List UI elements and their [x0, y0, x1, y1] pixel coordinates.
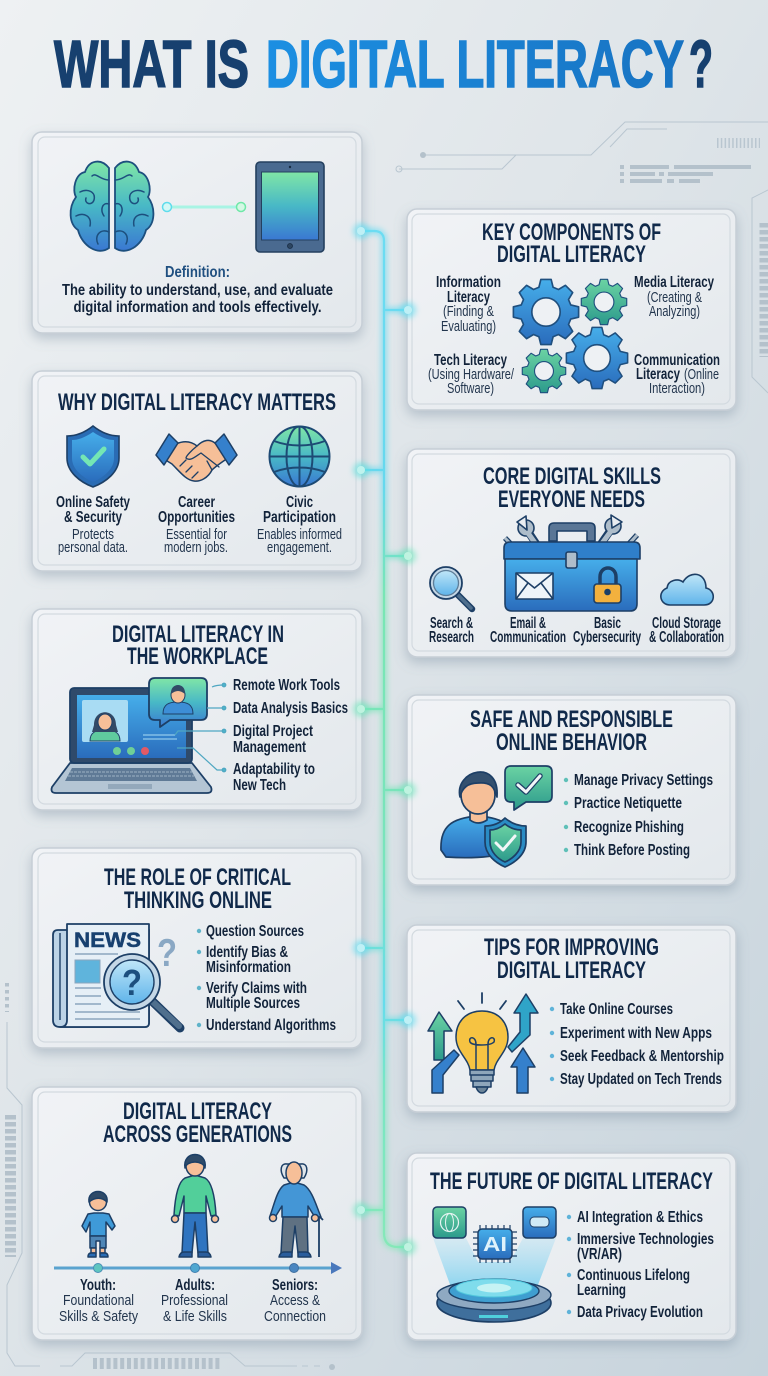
- icon: person with shield and chat: [441, 766, 552, 867]
- text: information literacy: [436, 274, 501, 335]
- panel: critical thinking: [32, 848, 362, 1048]
- text: skill labels: Email &: [510, 615, 546, 632]
- text: youth: Skills & Safety: [59, 1308, 138, 1325]
- text: tech literacy: Software): [447, 380, 494, 397]
- text: seniors: Connection: [264, 1308, 326, 1325]
- heading: WHY DIGITAL LITERACY MATTERS: [58, 389, 336, 416]
- icon: senior figure: [270, 1162, 323, 1257]
- heading: [482, 219, 661, 268]
- definition text: digital information and tools effectively.: [74, 299, 322, 316]
- list: critical thinking: Misinformation: [206, 959, 291, 976]
- icon: light bulb with arrows: [428, 993, 538, 1093]
- timeline arrow: [54, 1262, 342, 1274]
- text: online safety: & Security: [64, 509, 122, 526]
- heading: [484, 934, 659, 984]
- callout lines: [175, 683, 226, 772]
- list: workplace skills: Adaptability to: [233, 761, 315, 778]
- list: future trends: AI Integration & Ethics: [577, 1209, 703, 1226]
- text: communication literacy: Interaction): [649, 380, 705, 397]
- icon: laptop with video call: [52, 678, 212, 793]
- heading: DIGITAL LITERACY: [497, 241, 646, 268]
- heading: TIPS FOR IMPROVING: [484, 934, 659, 961]
- list: tips: [550, 1001, 724, 1088]
- icon: magnifier: [430, 567, 472, 609]
- text: skill labels: Search &: [430, 615, 473, 632]
- text: online safety: Protects: [72, 526, 114, 543]
- panel: key components: [407, 209, 736, 410]
- icon: toolbox: [504, 515, 640, 611]
- list: workplace skills: Digital Project: [233, 723, 313, 740]
- definition text: Definition:: [165, 264, 230, 281]
- text: media literacy: [634, 274, 714, 320]
- definition text: The ability to understand, use, and evaluate: [62, 282, 333, 299]
- heading: DIGITAL LITERACY IN: [112, 621, 284, 648]
- connector: brain to tablet: [162, 202, 246, 212]
- text: youth: Foundational: [63, 1292, 134, 1309]
- text: career opportunities: Opportunities: [158, 509, 235, 526]
- list: tips: Experiment with New Apps: [560, 1025, 712, 1042]
- list: workplace skills: New Tech: [233, 777, 286, 794]
- text: youth: [59, 1277, 138, 1325]
- list: tips: Take Online Courses: [560, 1001, 673, 1018]
- list: safe behaviors: Manage Privacy Settings: [574, 772, 713, 789]
- heading: ONLINE BEHAVIOR: [496, 729, 647, 756]
- text: seniors: Seniors:: [272, 1277, 318, 1294]
- text: online safety: Online Safety: [56, 494, 130, 511]
- heading: [103, 1098, 292, 1148]
- heading: [112, 621, 284, 670]
- list: safe behaviors: [564, 772, 713, 859]
- icon: gears: [513, 279, 628, 393]
- heading: THINKING ONLINE: [124, 887, 272, 914]
- heading: [483, 463, 661, 513]
- heading: ACROSS GENERATIONS: [103, 1121, 292, 1148]
- icon: newspaper and magnifier: NEWS: [74, 929, 141, 952]
- text: skill labels: & Collaboration: [649, 629, 724, 646]
- text: adults: Professional: [161, 1292, 228, 1309]
- list: critical thinking: [197, 923, 336, 1034]
- list: safe behaviors: Practice Netiquette: [574, 795, 682, 812]
- list: future trends: (VR/AR): [577, 1246, 622, 1263]
- panel: definition: [32, 132, 362, 333]
- icon: shield: [67, 426, 119, 487]
- icon: adult figure: [172, 1154, 218, 1257]
- list: future trends: [567, 1209, 714, 1321]
- icon: AI hologram platform: [433, 1207, 556, 1322]
- text: career opportunities: Career: [178, 494, 215, 511]
- panel: why digital literacy matters: [32, 371, 362, 571]
- panel: workplace: [32, 609, 362, 810]
- panel: future: [407, 1153, 736, 1340]
- text: skill labels: Research: [429, 629, 474, 646]
- heading: DIGITAL LITERACY: [123, 1098, 272, 1125]
- text: civic participation: engagement.: [267, 539, 332, 556]
- icon: brain: [71, 162, 153, 251]
- text: tech literacy: (Using Hardware/: [428, 366, 515, 383]
- heading: THE WORKPLACE: [127, 643, 268, 670]
- text: civic participation: Civic: [286, 494, 313, 511]
- list: critical thinking: Understand Algorithms: [206, 1017, 336, 1034]
- icon: handshake: [156, 434, 237, 481]
- list: safe behaviors: Recognize Phishing: [574, 819, 684, 836]
- icon: cloud: [661, 574, 713, 605]
- title: ?: [689, 27, 713, 102]
- text: tech literacy: [428, 352, 515, 397]
- heading: CORE DIGITAL SKILLS: [483, 463, 661, 490]
- icon: newspaper and magnifier: ?: [122, 962, 142, 1003]
- text: communication literacy: Communication: [634, 352, 720, 369]
- text: communication literacy: [634, 352, 720, 397]
- text: skill labels: Cybersecurity: [573, 629, 641, 646]
- text: adults: & Life Skills: [163, 1308, 227, 1325]
- definition text: [62, 264, 333, 316]
- list: future trends: Data Privacy Evolution: [577, 1304, 703, 1321]
- icon: newspaper and magnifier: ?: [157, 932, 177, 975]
- text: youth: Youth:: [80, 1277, 116, 1294]
- panel: generations: [32, 1087, 362, 1340]
- text: career opportunities: [158, 494, 235, 556]
- text: media literacy: Media Literacy: [634, 274, 714, 291]
- text: communication literacy: (Online: [684, 366, 719, 383]
- heading: DIGITAL LITERACY: [497, 957, 646, 984]
- icon: globe: [270, 426, 330, 486]
- list: critical thinking: Multiple Sources: [206, 995, 300, 1012]
- text: tech literacy: Tech Literacy: [434, 352, 507, 369]
- text: media literacy: Analyzing): [649, 303, 700, 320]
- text: online safety: [56, 494, 130, 556]
- panel: tips: [407, 925, 736, 1112]
- title: [54, 27, 713, 102]
- heading: [470, 706, 673, 756]
- panel: core skills: [407, 449, 736, 657]
- text: skill labels: Communication: [490, 629, 566, 646]
- list: workplace skills: Data Analysis Basics: [233, 700, 348, 717]
- text: information literacy: Evaluating): [441, 318, 496, 335]
- text: information literacy: Literacy: [447, 289, 490, 306]
- text: adults: Adults:: [175, 1277, 215, 1294]
- panel: safe behavior: [407, 695, 736, 885]
- text: seniors: Access &: [270, 1292, 320, 1309]
- text: communication literacy: Literacy: [636, 366, 680, 383]
- text: career opportunities: modern jobs.: [164, 539, 228, 556]
- icon: newspaper and magnifier: [53, 924, 180, 1028]
- text: career opportunities: Essential for: [166, 526, 227, 543]
- icon: AI hologram platform: AI: [483, 1234, 507, 1256]
- list: critical thinking: Identify Bias &: [206, 944, 288, 961]
- connector: glowing timeline: [353, 223, 416, 1255]
- heading: THE ROLE OF CRITICAL: [104, 864, 291, 891]
- text: adults: [161, 1277, 228, 1325]
- heading: SAFE AND RESPONSIBLE: [470, 706, 673, 733]
- list: future trends: Continuous Lifelong: [577, 1267, 690, 1284]
- list: workplace skills: [233, 677, 348, 794]
- text: skill labels: Cloud Storage: [652, 615, 721, 632]
- text: information literacy: (Finding &: [443, 303, 494, 320]
- text: online safety: personal data.: [58, 539, 128, 556]
- icon: tablet: [256, 162, 324, 252]
- text: civic participation: Participation: [263, 509, 336, 526]
- text: skill labels: Basic: [594, 615, 621, 632]
- list: future trends: Learning: [577, 1282, 626, 1299]
- heading: EVERYONE NEEDS: [498, 486, 645, 513]
- list: workplace skills: Management: [233, 739, 306, 756]
- list: workplace skills: Remote Work Tools: [233, 677, 340, 694]
- list: critical thinking: Verify Claims with: [206, 980, 307, 997]
- list: safe behaviors: Think Before Posting: [574, 842, 690, 859]
- text: seniors: [264, 1277, 326, 1325]
- icon: youth figure: [82, 1192, 115, 1257]
- list: future trends: Immersive Technologies: [577, 1231, 714, 1248]
- text: skill labels: [429, 615, 724, 646]
- text: media literacy: (Creating &: [647, 289, 702, 306]
- text: civic participation: [257, 494, 342, 556]
- text: information literacy: Information: [436, 274, 501, 291]
- heading: KEY COMPONENTS OF: [482, 219, 661, 246]
- text: civic participation: Enables informed: [257, 526, 342, 543]
- heading: [104, 864, 291, 914]
- title: WHAT IS: [54, 27, 249, 102]
- list: critical thinking: Question Sources: [206, 923, 304, 940]
